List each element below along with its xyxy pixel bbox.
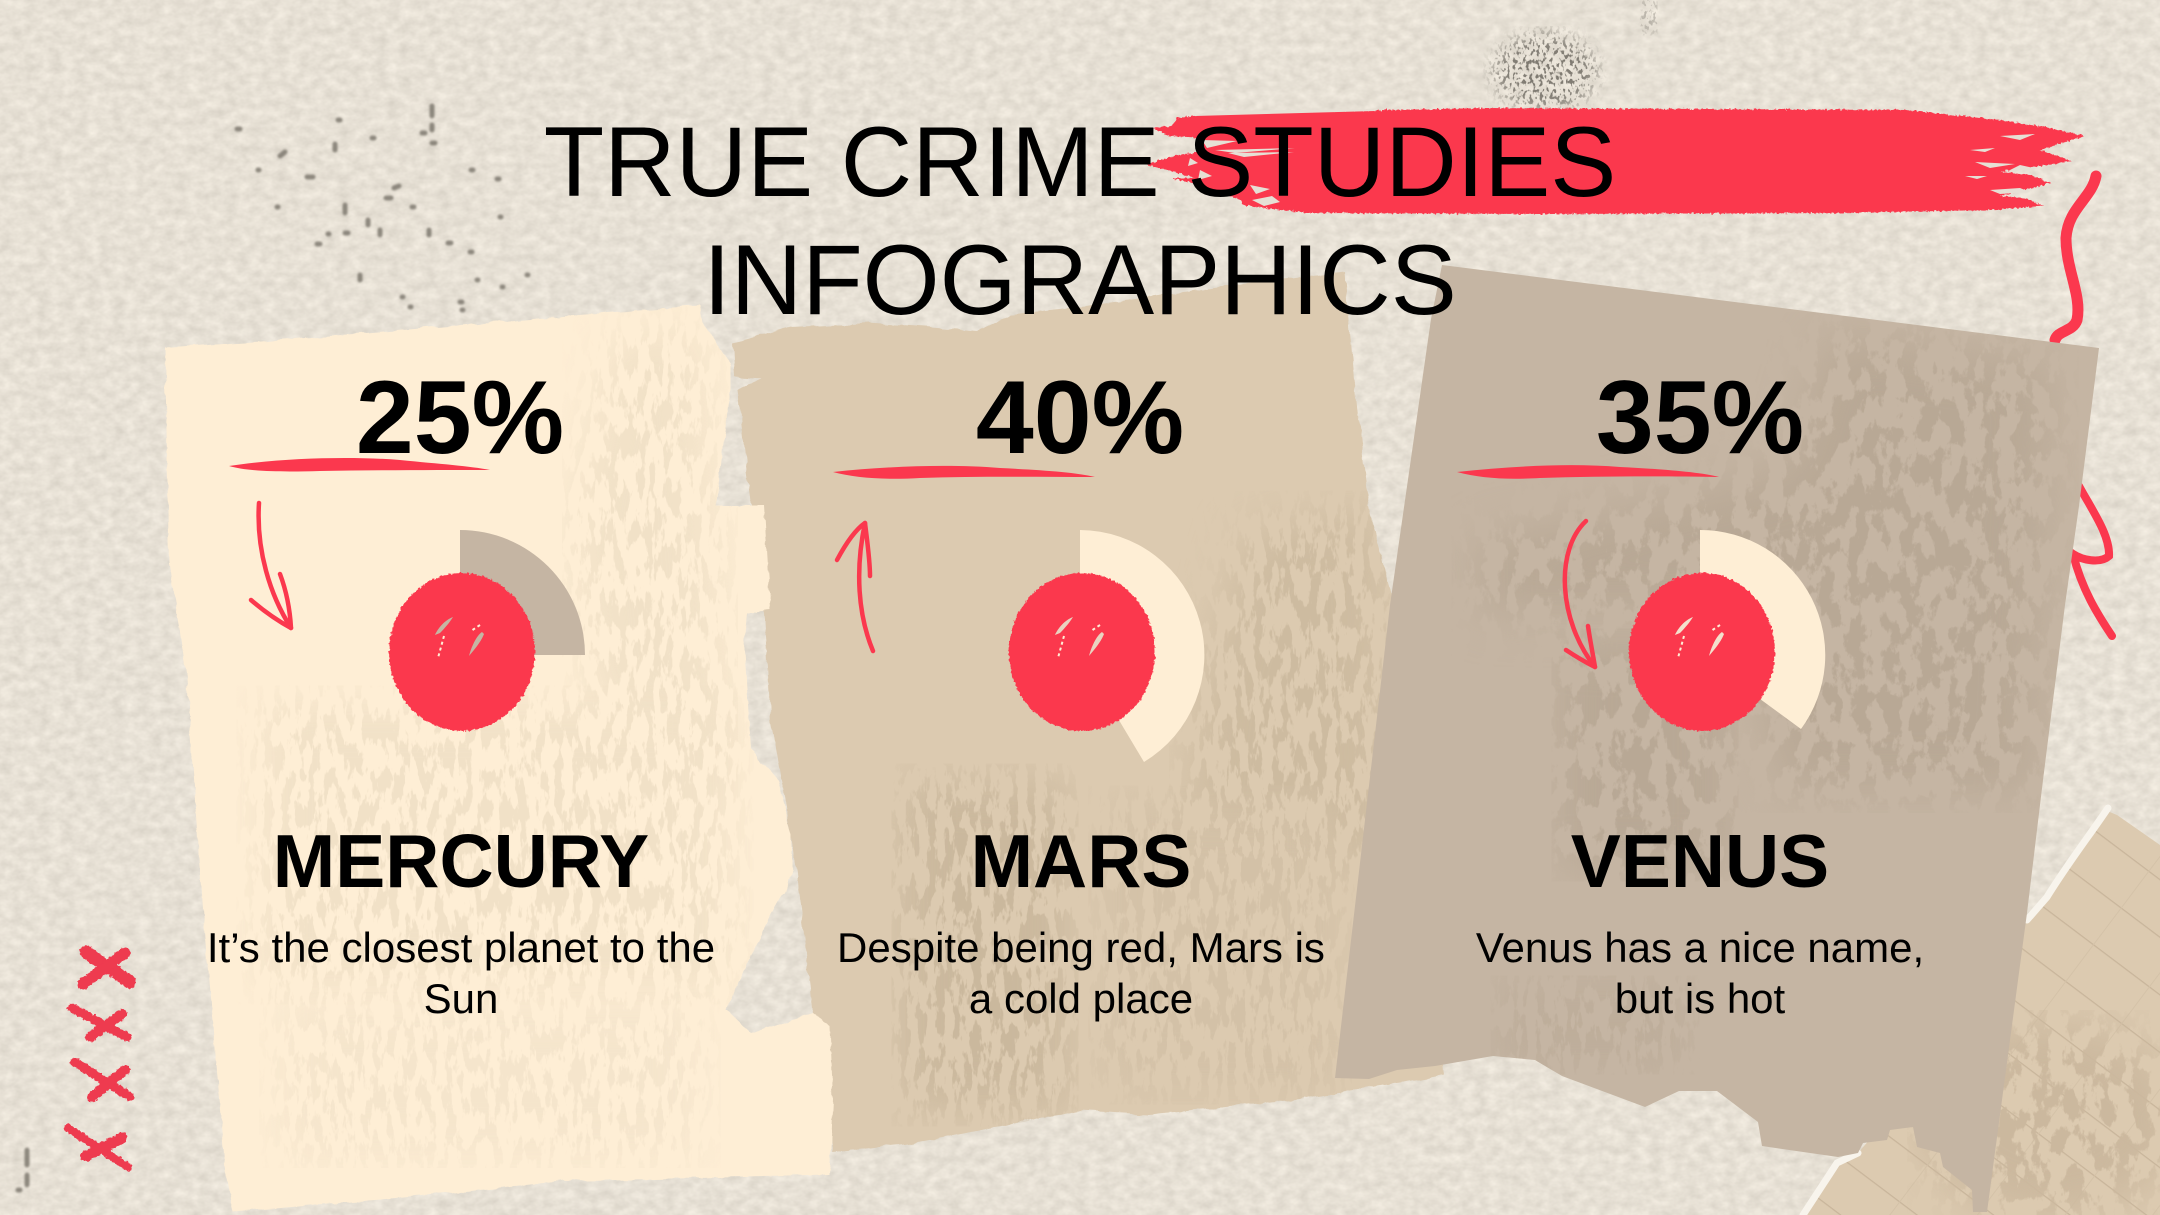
brush flecks — [1188, 109, 2038, 206]
arrow: Mars up — [837, 523, 873, 651]
pie chart: Venus 35% — [1629, 530, 1825, 731]
heading: Mercury: MERCURY — [273, 819, 649, 903]
text: Mars description: a cold place — [969, 975, 1193, 1022]
planet: Mars — [1009, 573, 1155, 731]
heading: Mars: MARS — [971, 819, 1191, 903]
red brush stroke behind title — [1147, 108, 2085, 214]
text: Venus description: Venus has a nice name, — [1476, 924, 1924, 971]
stat: Mars 40%: 40% — [976, 360, 1184, 476]
panel: Mars paper — [733, 272, 1445, 1152]
paper grunge: Mars — [900, 510, 1395, 1110]
paper grunge: Mercury — [260, 325, 730, 1160]
red underline: Mars — [833, 466, 1095, 479]
torn lined paper, bottom right — [1803, 808, 2160, 1215]
pie chart: Mars 40% — [1009, 530, 1204, 762]
arrow: Mercury down — [251, 503, 291, 628]
paper grunge: Venus — [1480, 335, 2050, 1070]
arrow: Venus down — [1565, 521, 1595, 667]
red squiggle upper right — [2055, 176, 2096, 340]
text: Mars description: Despite being red, Mars is — [837, 924, 1325, 971]
pie chart: Mercury 25% — [389, 530, 585, 731]
planet: Mercury — [389, 573, 535, 731]
planet: Venus — [1629, 573, 1775, 731]
stat: Venus 35%: 35% — [1596, 360, 1804, 476]
icon: red cross marks — [68, 952, 130, 1167]
title: TRUE CRIME STUDIES — [544, 106, 1616, 217]
title: INFOGRAPHICS — [703, 224, 1457, 335]
text: Mercury description: It’s the closest planet to the — [207, 924, 715, 971]
red underline: Venus — [1457, 465, 1719, 479]
text: Mercury description: Sun — [424, 975, 498, 1022]
red squiggle lower right — [2073, 486, 2112, 636]
heading: Venus: VENUS — [1571, 819, 1829, 903]
stat: Mercury 25%: 25% — [356, 360, 564, 476]
panel: Mercury paper — [165, 305, 833, 1212]
red underline: Mercury — [229, 458, 490, 471]
text: Venus description: but is hot — [1615, 975, 1786, 1022]
panel: Venus paper — [1335, 265, 2099, 1212]
